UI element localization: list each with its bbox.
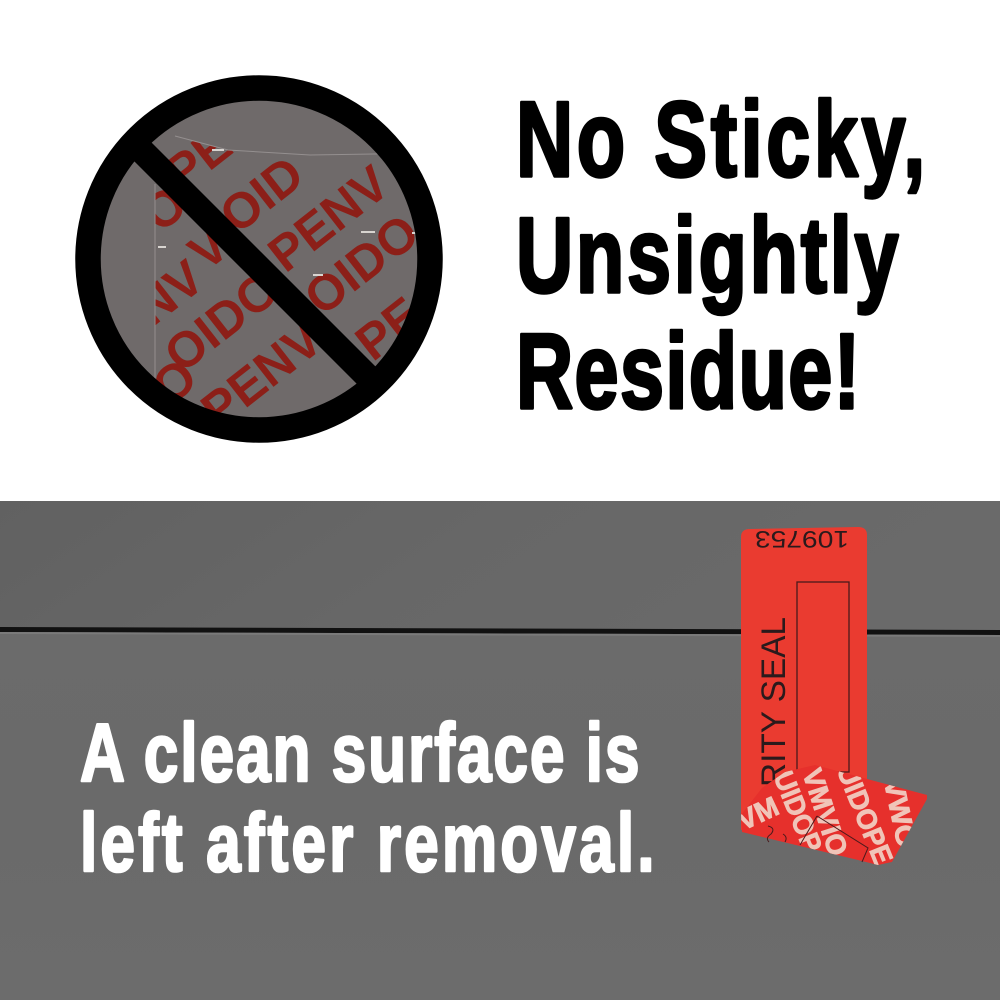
residue void pattern <box>154 136 416 412</box>
heading: No Sticky, Unsightly Residue!: Unsightly <box>516 195 899 315</box>
prohibition ring <box>88 88 430 430</box>
peeled flap <box>741 765 927 865</box>
text: clean surface message: A clean surface is <box>80 706 640 799</box>
residue void pattern: OID <box>209 145 314 244</box>
heading: No Sticky, Unsightly Residue!: Residue! <box>516 311 860 431</box>
text: clean surface message: left after removal. <box>80 796 654 889</box>
flap box outline <box>767 816 868 862</box>
prohibition slash <box>140 149 370 379</box>
residue void pattern: PENV <box>191 310 333 439</box>
residue void pattern: OIDO <box>294 203 429 326</box>
image: red security seal being peeled <box>732 525 927 869</box>
flap void pattern: UIDOPE <box>831 760 899 869</box>
residue void pattern: O <box>132 175 197 243</box>
seal signature box <box>797 582 849 772</box>
serial number: 109753 <box>755 525 849 552</box>
residue void pattern: O <box>142 348 207 416</box>
heading: No Sticky, Unsightly Residue! <box>516 79 925 431</box>
residue void pattern: PE <box>155 116 242 201</box>
flap void pattern: VM <box>732 790 784 836</box>
residue void pattern: V <box>178 216 239 281</box>
heading: No Sticky, Unsightly Residue!: No Sticky, <box>516 79 925 199</box>
seal text: RITY SEAL <box>755 617 793 787</box>
flap void pattern: VMVIO <box>796 764 854 860</box>
flap void pattern <box>741 766 913 865</box>
residue photo background <box>99 99 419 419</box>
text: clean surface message <box>80 706 654 889</box>
seal body <box>741 527 867 830</box>
panel: grey surface <box>0 501 1000 1000</box>
residue void pattern: PE <box>345 286 432 371</box>
flap void pattern: UIDOP <box>768 766 828 857</box>
residue void pattern: OIDO <box>154 260 289 383</box>
flap void pattern: VWO <box>878 776 923 850</box>
icon: prohibited residue symbol <box>88 88 440 439</box>
residue void pattern: NV <box>125 249 215 336</box>
residue void pattern: PENV <box>258 154 400 283</box>
panel: white header background <box>0 0 1000 501</box>
